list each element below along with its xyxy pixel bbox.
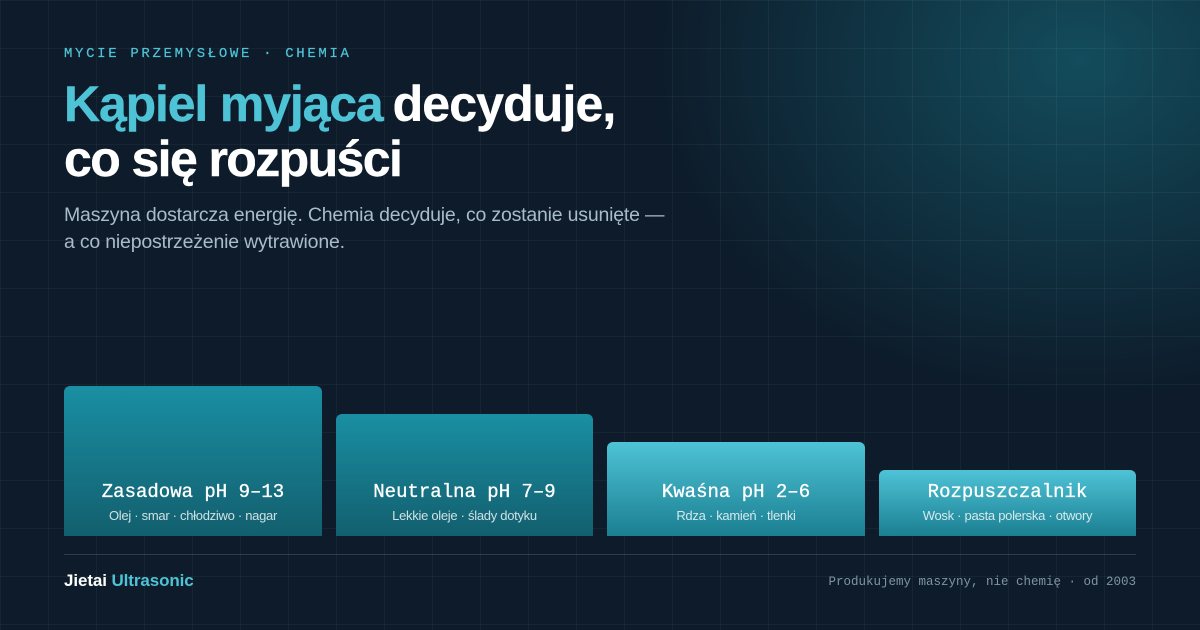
bar: acid bath: Kwaśna pH 2–6 bbox=[662, 481, 810, 503]
eyebrow label: MYCIE PRZEMYSŁOWE · CHEMIA bbox=[64, 46, 352, 62]
bar: neutral bath bbox=[336, 414, 593, 536]
bar: acid bath: Rdza · kamień · tlenki bbox=[676, 508, 796, 523]
bar: neutral bath: Lekkie oleje · ślady dotyku bbox=[392, 508, 537, 523]
bar: solvent bath: Wosk · pasta polerska · otwory bbox=[923, 508, 1092, 523]
footer tagline: Produkujemy maszyny, nie chemię · od 2003 bbox=[828, 575, 1136, 589]
bar: solvent bath: Rozpuszczalnik bbox=[928, 481, 1087, 503]
bar: solvent bath bbox=[879, 470, 1136, 536]
bar: alkaline bath: Olej · smar · chłodziwo · nagar bbox=[109, 508, 277, 523]
bar: alkaline bath: Zasadowa pH 9–13 bbox=[102, 481, 284, 503]
title: co się rozpuści bbox=[64, 131, 401, 187]
subtitle text: a co niepostrzeżenie wytrawione. bbox=[64, 231, 345, 253]
title bbox=[64, 76, 615, 187]
subtitle text bbox=[64, 204, 664, 253]
title: Kąpiel myjąca decyduje, bbox=[64, 76, 615, 132]
bar: neutral bath: Neutralna pH 7–9 bbox=[373, 481, 556, 503]
brand name: Jietai Ultrasonic bbox=[64, 571, 194, 590]
bar: alkaline bath bbox=[64, 386, 322, 536]
bar: acid bath bbox=[607, 442, 865, 536]
subtitle text: Maszyna dostarcza energię. Chemia decyduje, co zostanie usunięte — bbox=[64, 204, 664, 226]
